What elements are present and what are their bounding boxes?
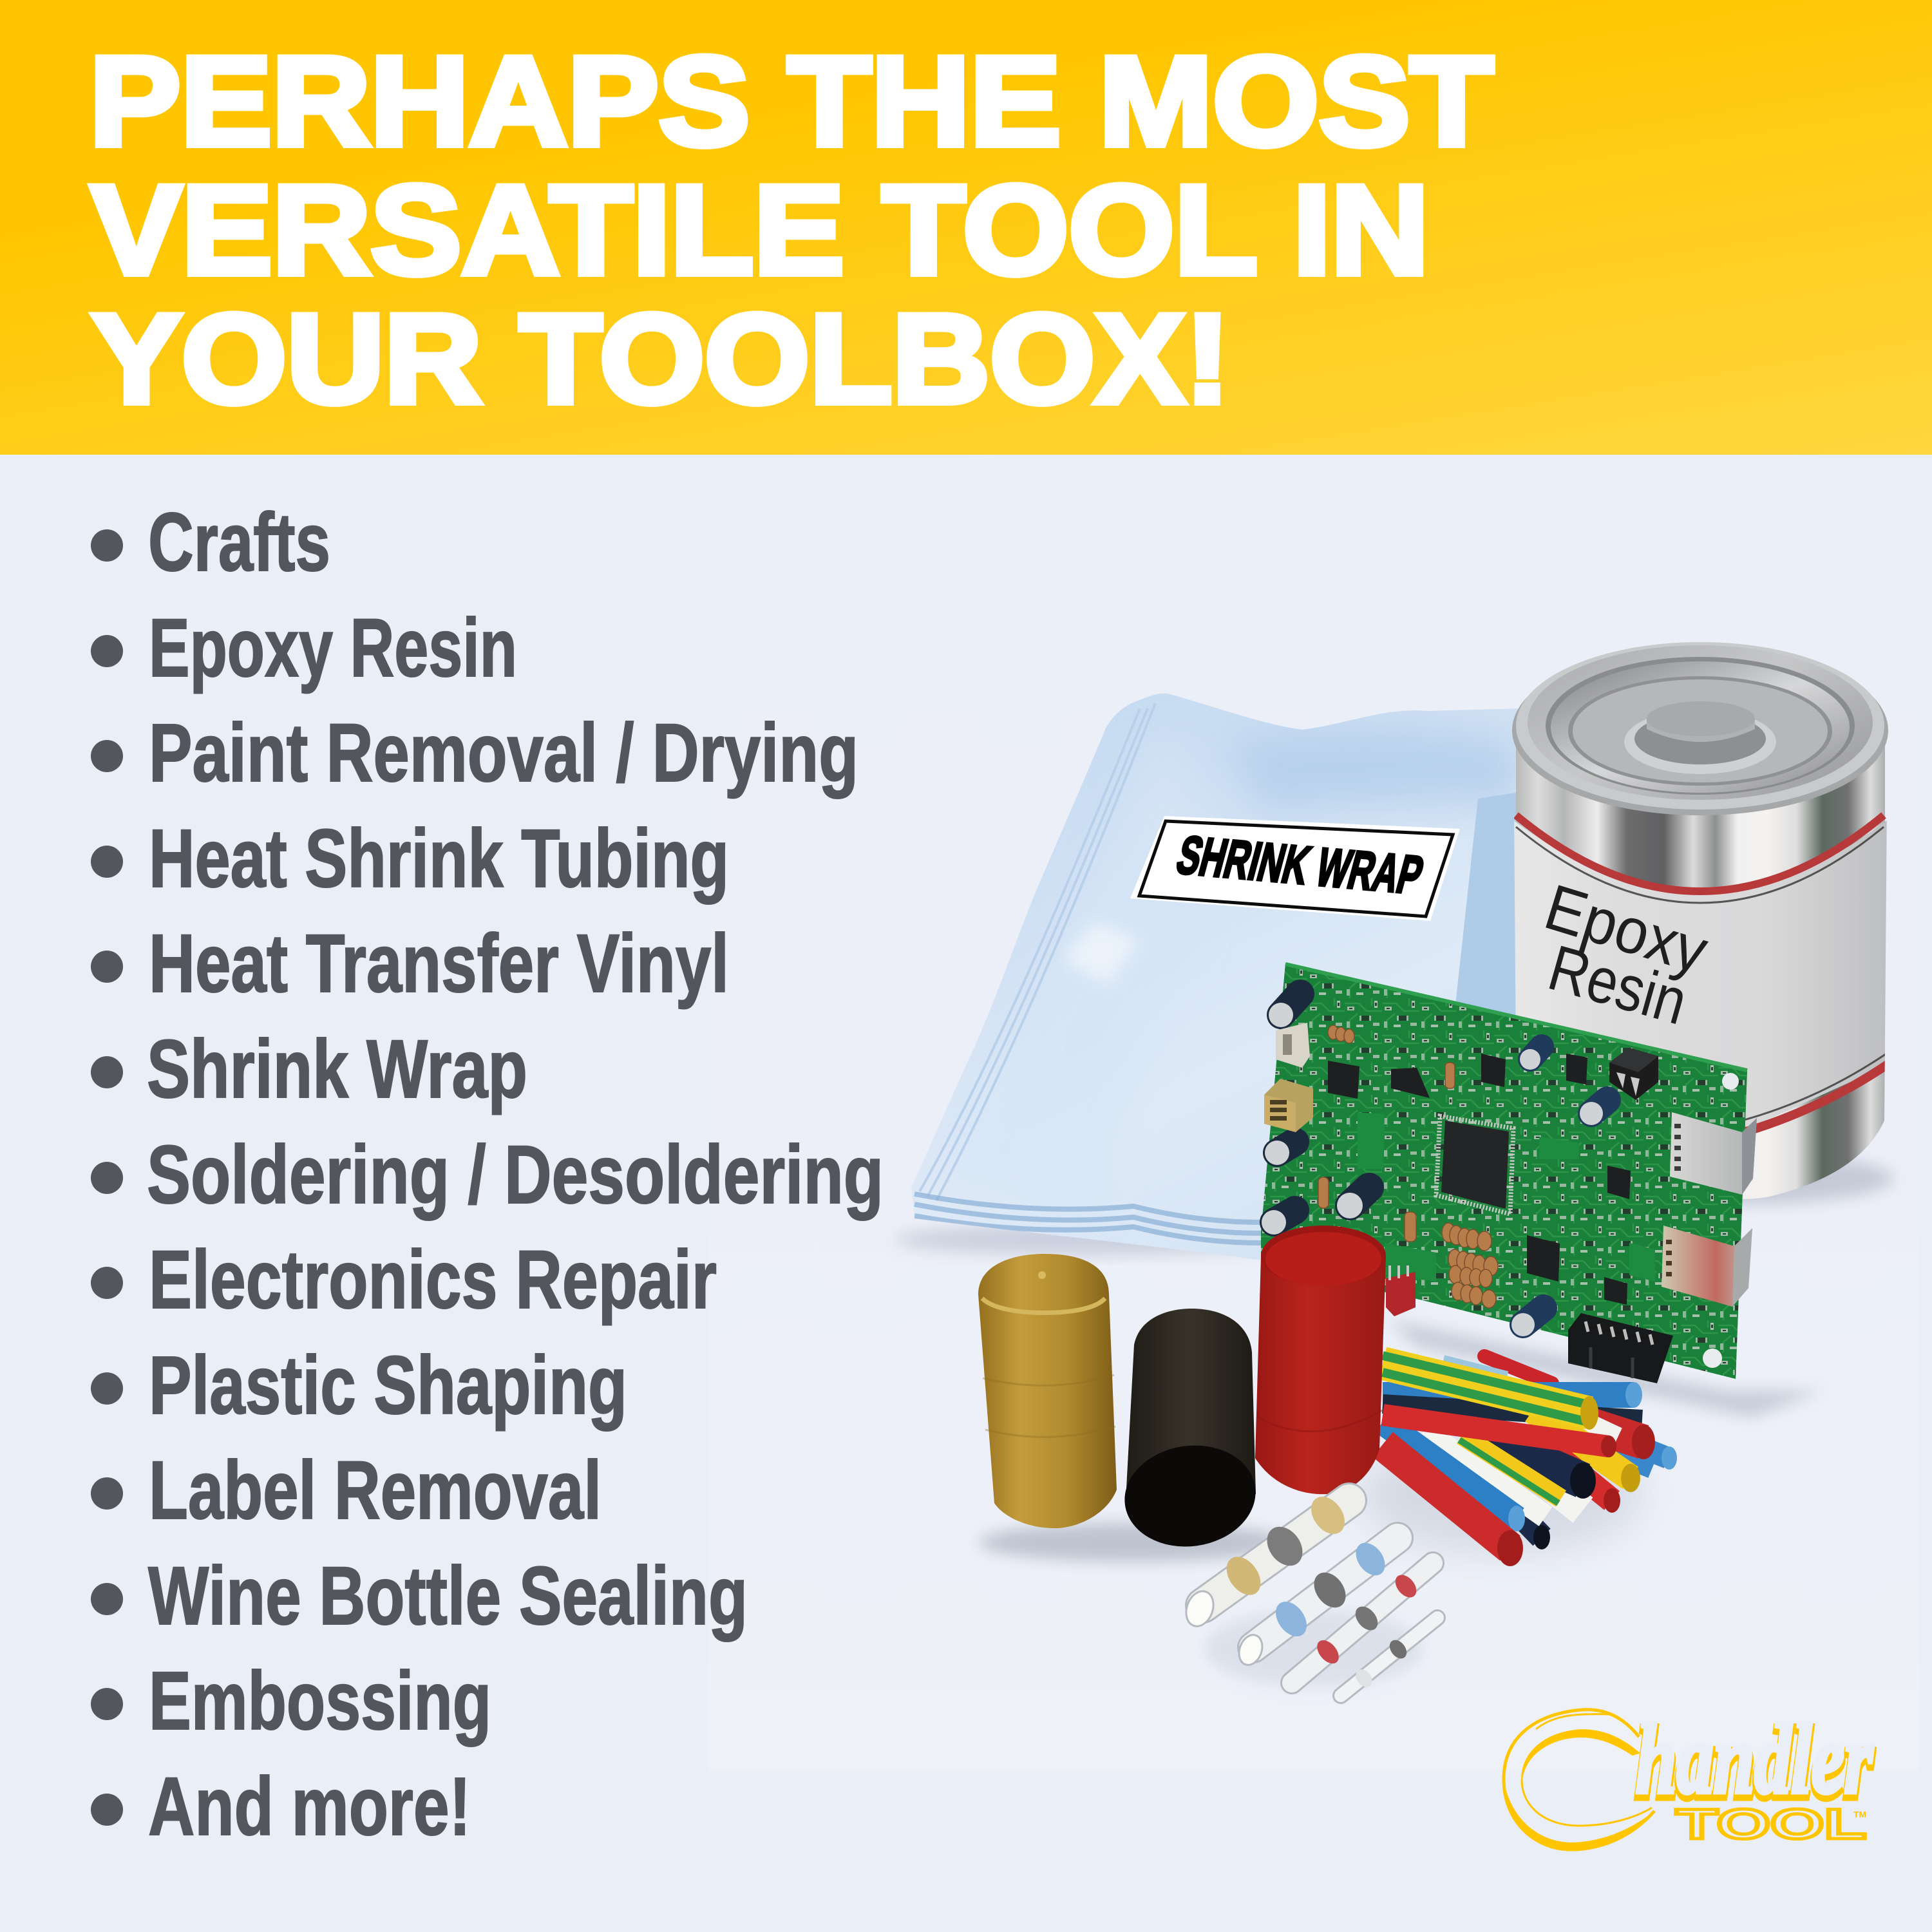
can lid bbox=[1512, 642, 1888, 815]
bullet: Electronics Repair: Electronics Repair bbox=[149, 1234, 717, 1326]
title: YOUR TOOLBOX! bbox=[91, 288, 1230, 430]
photo background bbox=[708, 518, 1919, 1771]
title: VERSATILE TOOL IN bbox=[91, 159, 1429, 301]
pin header bbox=[1568, 1313, 1673, 1383]
bag label: SHRINK WRAP: SHRINK WRAP bbox=[1171, 824, 1430, 905]
bullet: And more! bbox=[91, 1761, 471, 1853]
bullet: Epoxy Resin: Epoxy Resin bbox=[149, 602, 517, 694]
can label text: Epoxy Resin bbox=[1537, 871, 1716, 1039]
header band bbox=[0, 0, 1932, 455]
USB port upper bbox=[1670, 1112, 1757, 1195]
bullet: Paint Removal / Drying: Paint Removal / Drying bbox=[149, 707, 858, 799]
title bbox=[90, 30, 1493, 430]
bullet: Embossing: Embossing bbox=[149, 1655, 491, 1747]
bullet list bbox=[91, 497, 884, 1853]
USB port lower bbox=[1662, 1226, 1752, 1307]
logo TOOL: TOOL bbox=[1676, 1800, 1866, 1848]
can label text: Epoxy Resin: Resin bbox=[1541, 931, 1694, 1039]
bullet: Heat Transfer Vinyl: Heat Transfer Vinyl bbox=[149, 918, 729, 1010]
product photo: solder seal connectors bbox=[1182, 1490, 1437, 1696]
bullet: And more!: And more! bbox=[148, 1761, 471, 1853]
product photo: epoxy resin can bbox=[1507, 642, 1893, 1204]
bullet: Heat Shrink Tubing: Heat Shrink Tubing bbox=[149, 813, 729, 905]
logo: Chandler Tool bbox=[1504, 1703, 1873, 1850]
bullet: Plastic Shaping: Plastic Shaping bbox=[149, 1340, 627, 1432]
product photo: wine bottle shrink capsules bbox=[978, 1226, 1386, 1562]
left connectors bbox=[1264, 1023, 1313, 1132]
bullet: Crafts bbox=[91, 497, 330, 589]
bullet: Soldering / Desoldering: Soldering / Desoldering bbox=[147, 1129, 884, 1221]
mounting holes bbox=[1703, 1073, 1739, 1368]
microchip bbox=[1436, 1116, 1513, 1214]
board chips bbox=[1328, 1054, 1631, 1305]
red capsule bbox=[1255, 1226, 1386, 1494]
bullet: Shrink Wrap: Shrink Wrap bbox=[147, 1023, 527, 1115]
product photo: shrink wrap bag bbox=[895, 694, 1520, 1275]
bullet: Crafts: Crafts bbox=[148, 497, 330, 589]
bullet: Wine Bottle Sealing: Wine Bottle Sealing bbox=[148, 1550, 748, 1642]
bullet: Label Removal: Label Removal bbox=[149, 1444, 601, 1537]
title: PERHAPS THE MOST bbox=[90, 30, 1493, 172]
red connector bbox=[1386, 1265, 1416, 1316]
resistor array bbox=[1318, 1025, 1498, 1308]
bullet: Epoxy Resin bbox=[91, 602, 517, 694]
product photo: circuit board bbox=[1261, 964, 1823, 1417]
capacitors bbox=[1262, 994, 1607, 1336]
logo trademark: TM bbox=[1853, 1810, 1866, 1819]
bag label: SHRINK WRAP bbox=[1130, 816, 1460, 921]
bullet: Embossing bbox=[91, 1655, 491, 1747]
power jack bbox=[1609, 1048, 1658, 1100]
product photo: heat shrink tubing bundle bbox=[1359, 1356, 1677, 1566]
can label text: Epoxy Resin: Epoxy bbox=[1537, 871, 1716, 988]
black capsule bbox=[1118, 1309, 1262, 1555]
board body bbox=[1261, 964, 1747, 1379]
gold capsule bbox=[978, 1254, 1117, 1528]
board plain copper areas bbox=[1358, 1112, 1655, 1282]
logo swoosh C bbox=[1504, 1710, 1654, 1850]
